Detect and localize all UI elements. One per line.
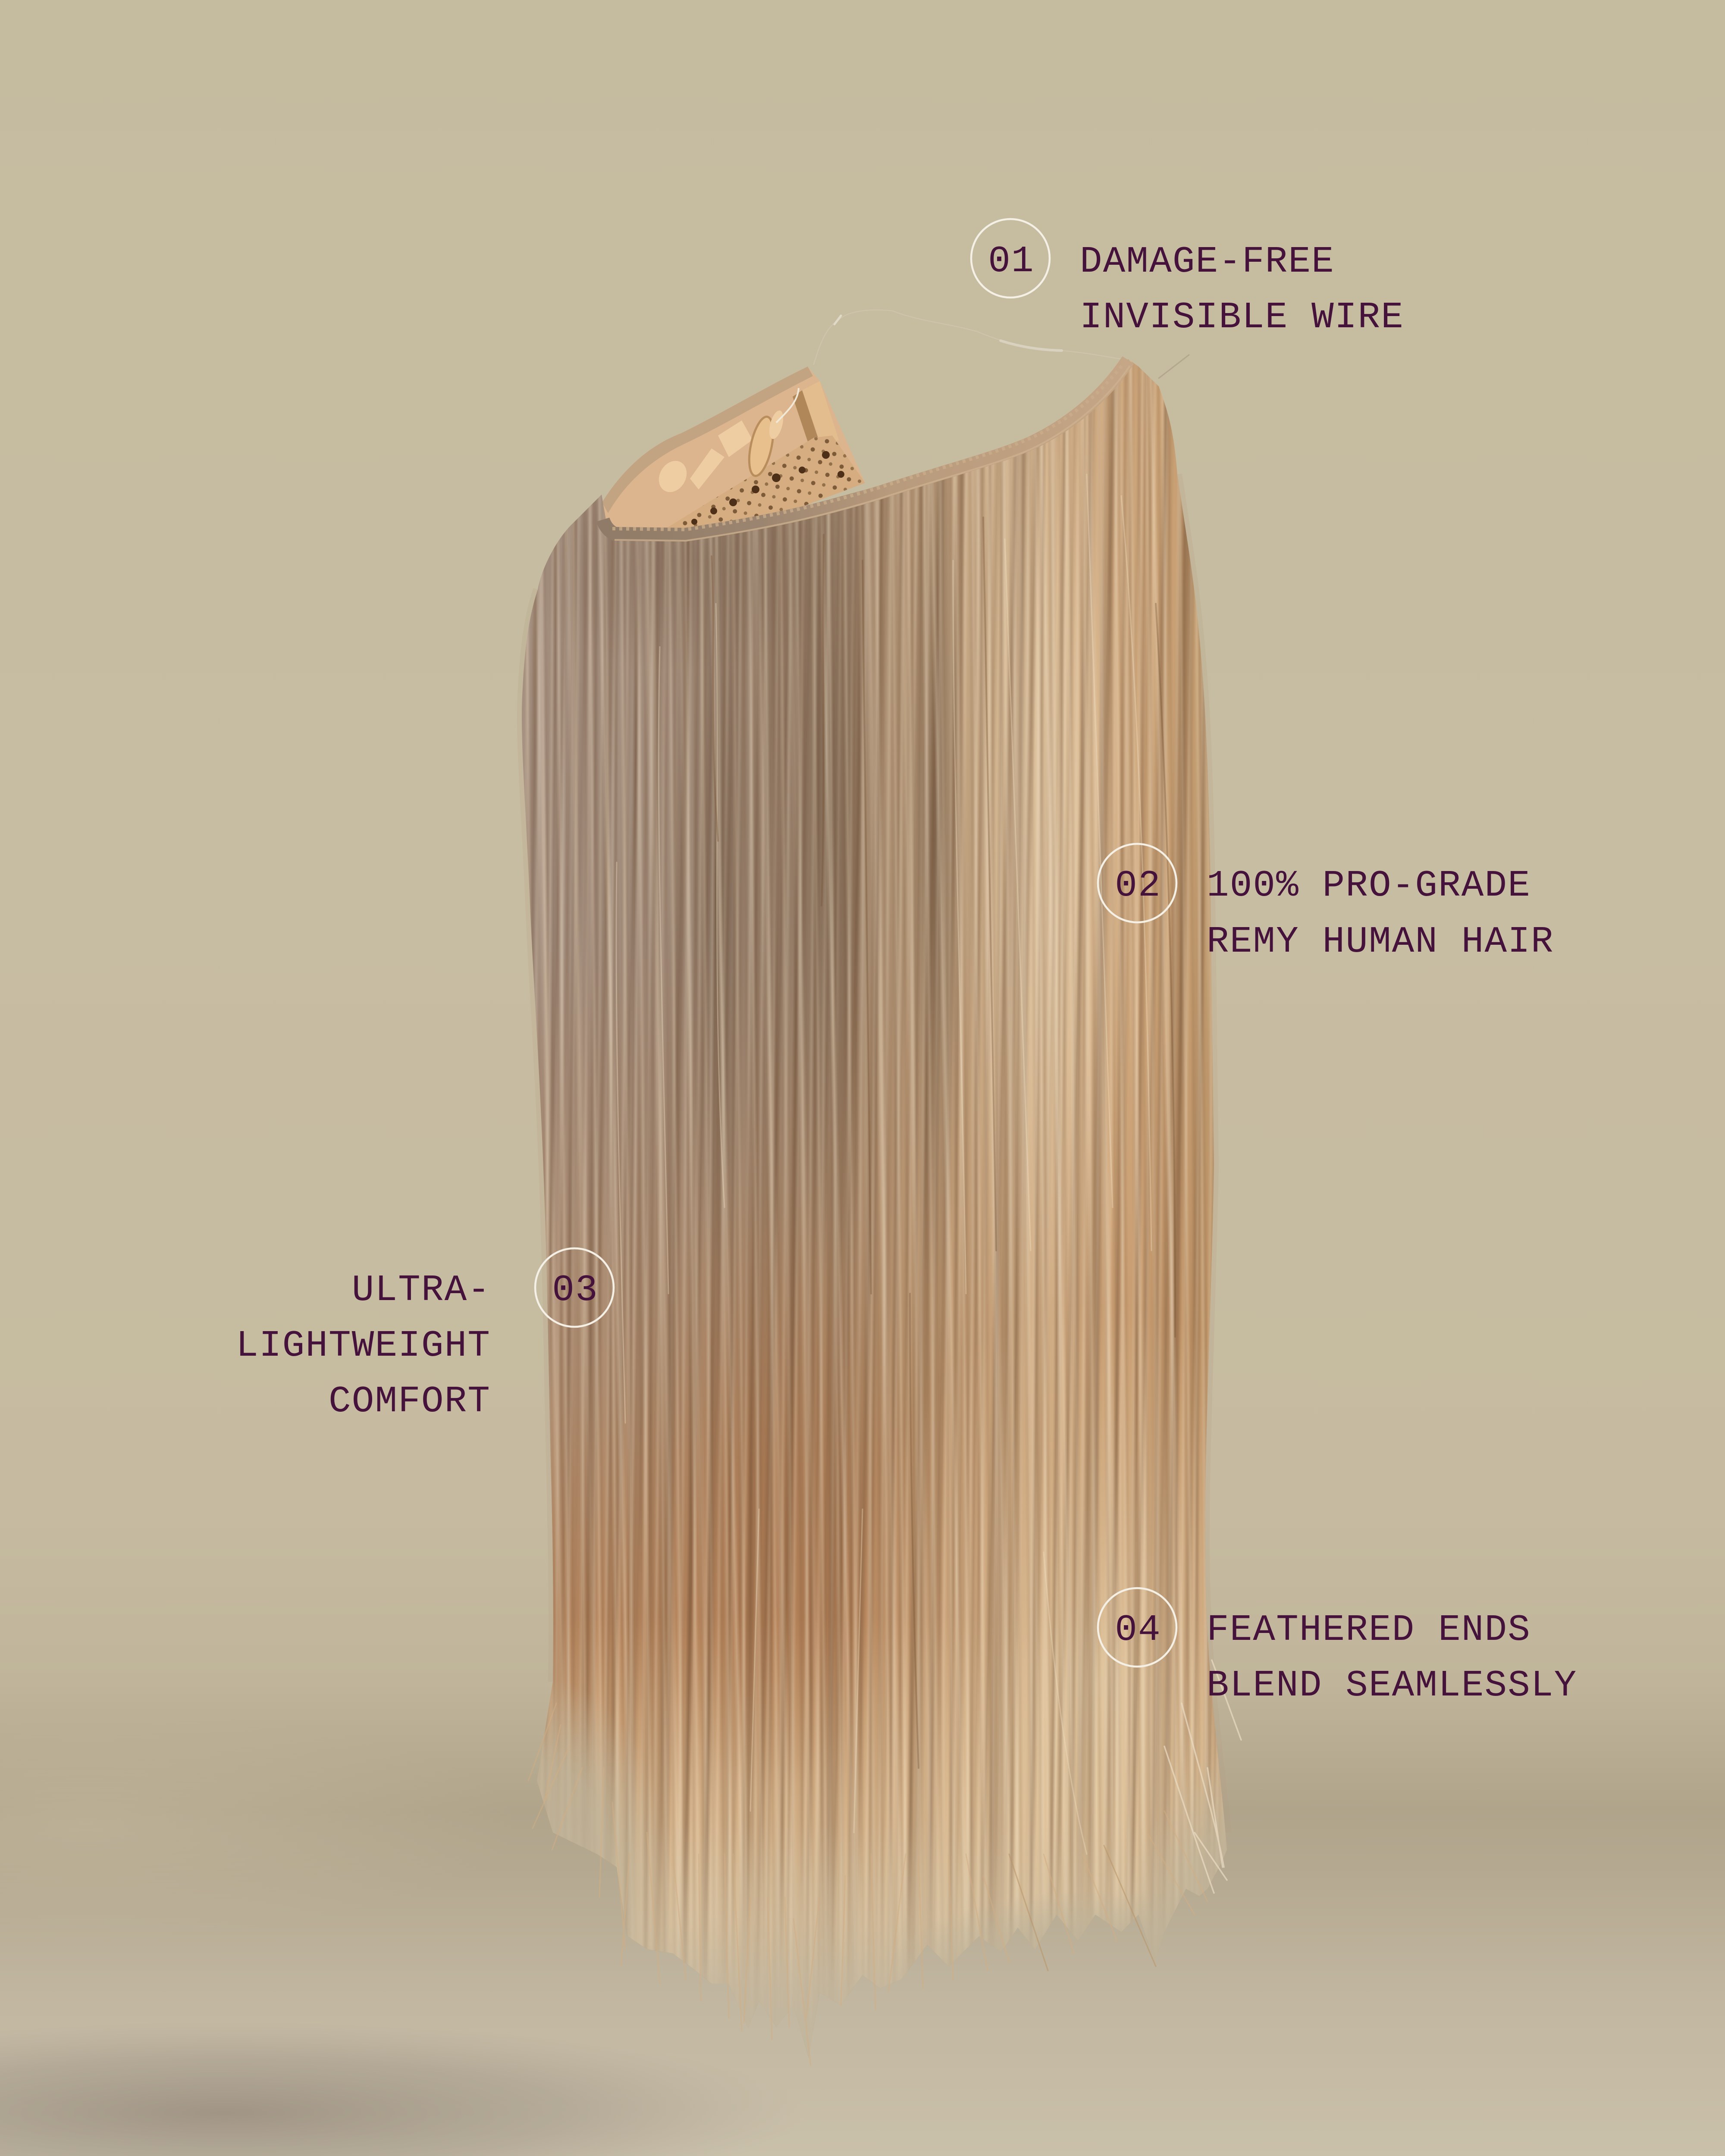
badge 04: 04 bbox=[1115, 1609, 1161, 1651]
label 03: LIGHTWEIGHT bbox=[236, 1325, 491, 1367]
badge 03 bbox=[535, 1248, 614, 1327]
badge 01: 01 bbox=[988, 240, 1035, 282]
badge 03: 03 bbox=[552, 1269, 599, 1311]
callout 04: feathered ends bbox=[1098, 1588, 1577, 1707]
label 01: INVISIBLE WIRE bbox=[1080, 296, 1404, 338]
label 04: FEATHERED ENDS bbox=[1207, 1609, 1531, 1651]
badge 04 bbox=[1098, 1588, 1176, 1667]
highlight strands bbox=[616, 474, 1151, 1854]
label 03: COMFORT bbox=[329, 1380, 491, 1423]
fade toward feathered ends bbox=[496, 1824, 1238, 2061]
invisible wire bbox=[814, 310, 1189, 378]
bright flyaway strands bbox=[1164, 1660, 1241, 1893]
label 02: 100% PRO-GRADE bbox=[1207, 865, 1531, 907]
callout 03: ultra-lightweight comfort bbox=[236, 1248, 614, 1423]
label 01: DAMAGE-FREE bbox=[1080, 241, 1335, 283]
label 04: BLEND SEAMLESSLY bbox=[1207, 1664, 1577, 1707]
hair piece bbox=[522, 356, 1242, 2066]
feathered hair tips bbox=[528, 1703, 1208, 2065]
badge 01 bbox=[971, 219, 1050, 298]
badge 02 bbox=[1098, 844, 1176, 922]
weft band bbox=[603, 360, 1130, 541]
label 03: ULTRA- bbox=[352, 1269, 491, 1311]
clip bbox=[653, 409, 786, 497]
callout 02: remy human hair bbox=[1098, 844, 1554, 963]
broad strand shading bbox=[608, 535, 752, 611]
label 02: REMY HUMAN HAIR bbox=[1207, 921, 1554, 963]
lace cap with clip bbox=[602, 367, 865, 535]
hair body bbox=[522, 359, 1227, 2058]
hair edge softening bbox=[522, 474, 1227, 1833]
badge 02: 02 bbox=[1115, 865, 1161, 907]
mesh dark holes bbox=[691, 451, 844, 525]
callout 01: damage-free invisible wire bbox=[971, 219, 1404, 338]
strand texture bbox=[579, 385, 1195, 1951]
dark strands bbox=[712, 517, 1175, 1768]
